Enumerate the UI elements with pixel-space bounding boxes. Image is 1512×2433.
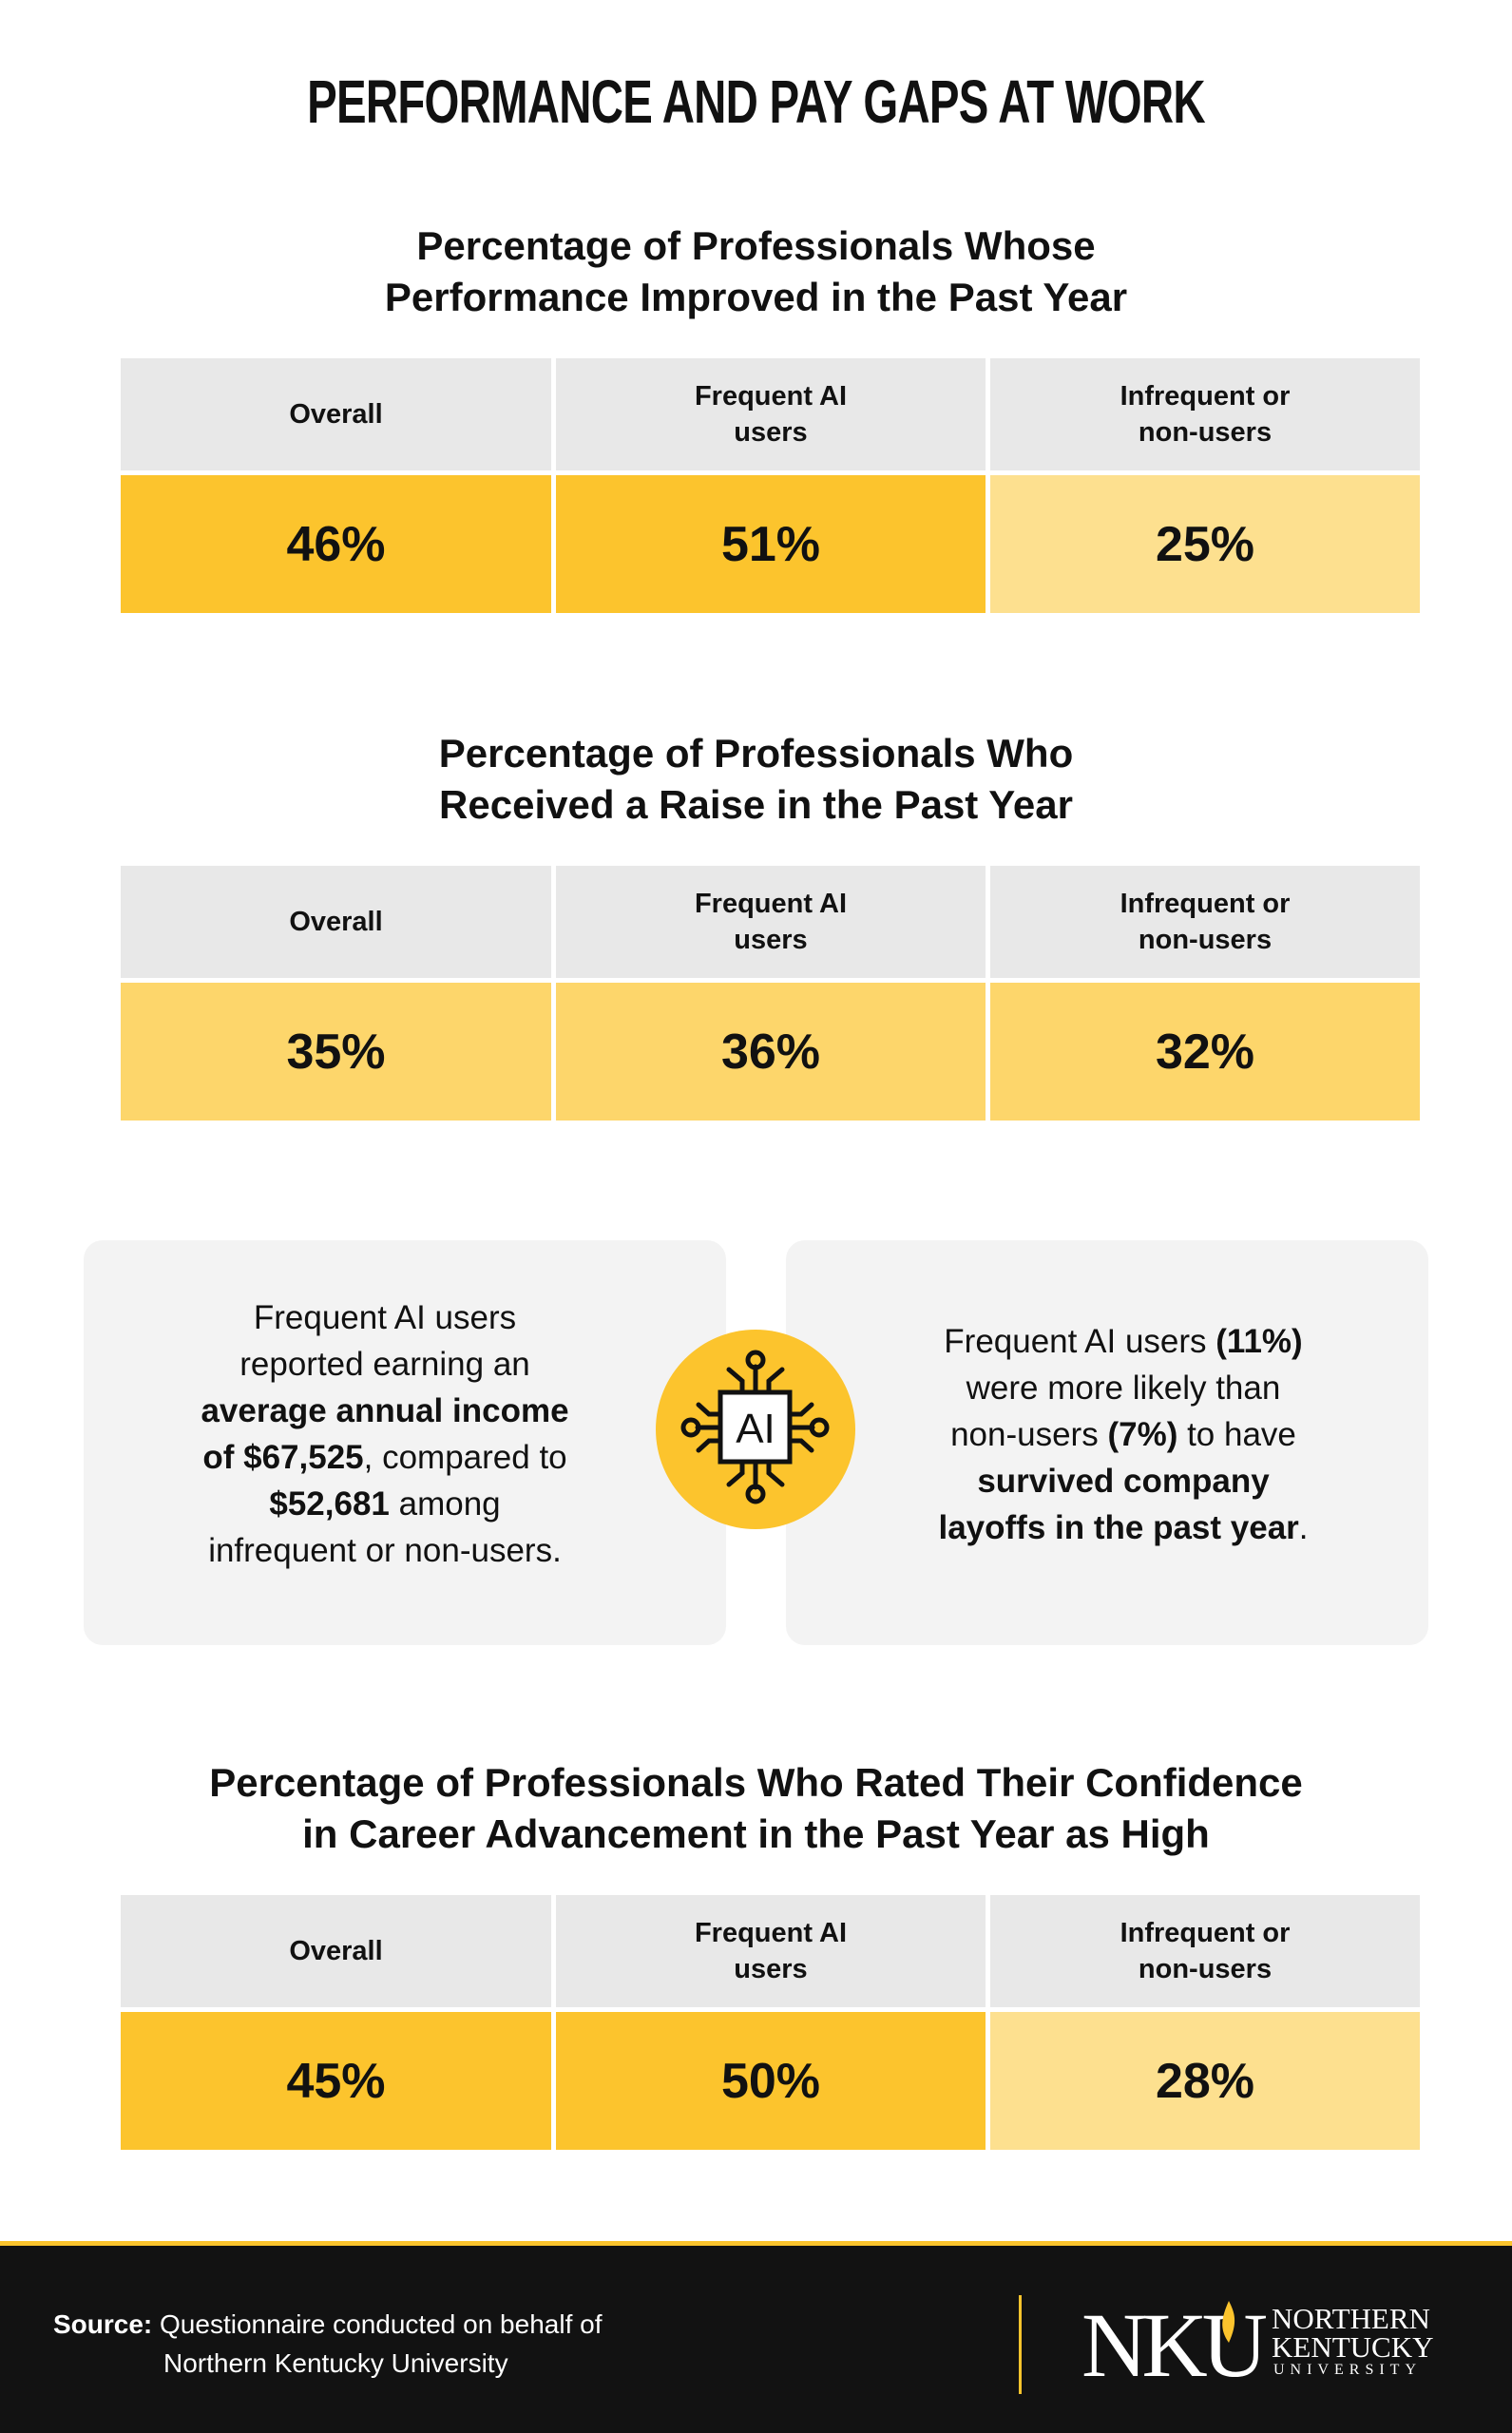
callout: income: of $67,525, compared to [202, 1439, 567, 1476]
callout: layoffs: were more likely than [967, 1370, 1280, 1407]
heading: confidence: Percentage of Professionals Who Rated Their Confidence [209, 1760, 1303, 1805]
heading: raise: Percentage of Professionals Who [439, 731, 1073, 776]
callout: income: $52,681 among [269, 1485, 501, 1523]
heading: performance [385, 223, 1127, 319]
table: confidence: non-users [1139, 1954, 1272, 1984]
heading: raise: Received a Raise in the Past Year [439, 782, 1073, 827]
table: performance: 25% [1156, 517, 1254, 572]
footer [0, 2241, 1512, 2433]
table: performance: 46% [286, 517, 386, 572]
table: raise: 32% [1156, 1025, 1254, 1080]
table: performance [121, 358, 1420, 613]
heading: confidence [209, 1760, 1303, 1856]
table: confidence: Infrequent or [1120, 1918, 1290, 1948]
callout: layoffs: non-users (7%) to have [950, 1416, 1296, 1453]
divider line [1019, 2295, 1022, 2394]
icon: AI chip: AI [736, 1406, 775, 1452]
table: raise: 35% [286, 1025, 386, 1080]
title: PERFORMANCE AND PAY GAPS AT WORK [307, 67, 1205, 136]
callout: income: reported earning an [239, 1346, 530, 1383]
table: performance: Infrequent or [1120, 381, 1290, 412]
logo: NKU [1081, 2294, 1433, 2396]
table: confidence: Frequent AI [695, 1918, 847, 1948]
heading: performance: Performance Improved in the Past Year [385, 275, 1127, 319]
table: confidence: users [734, 1954, 808, 1984]
source text: Source: Questionnaire conducted on behalf of [53, 2309, 602, 2339]
logo: NKU: NORTHERN [1272, 2302, 1430, 2335]
table: confidence [121, 1895, 1420, 2150]
table: performance: Frequent AI [695, 381, 847, 412]
callout: layoffs: survived company [977, 1463, 1270, 1500]
callout: income [84, 1240, 726, 1645]
callout: income: average annual income [201, 1392, 569, 1429]
table: confidence: 28% [1156, 2053, 1254, 2108]
table: performance: 51% [721, 517, 820, 572]
table: raise: non-users [1139, 925, 1272, 955]
heading: performance: Percentage of Professionals Whose [416, 223, 1096, 268]
table: raise [121, 866, 1420, 1121]
logo: NKU: NKU [1081, 2294, 1262, 2396]
callout: layoffs: layoffs in the past year. [938, 1509, 1309, 1546]
table: raise: Frequent AI [695, 889, 847, 919]
callout: income: infrequent or non-users. [208, 1532, 562, 1569]
table: performance: users [734, 417, 808, 448]
table: raise: 36% [721, 1025, 820, 1080]
source text [53, 2309, 603, 2378]
heading: raise [439, 731, 1073, 827]
table: raise: Overall [289, 907, 383, 937]
logo: NKU: KENTUCKY [1272, 2330, 1433, 2364]
logo: NKU: UNIVERSITY [1273, 2362, 1422, 2378]
table: raise: users [734, 925, 808, 955]
callout: income: Frequent AI users [254, 1299, 516, 1336]
callout: layoffs: Frequent AI users (11%) [944, 1323, 1303, 1360]
icon: AI chip [656, 1330, 855, 1529]
callout: layoffs [786, 1240, 1428, 1645]
heading: confidence: in Career Advancement in the Past Year as High [302, 1811, 1210, 1856]
table: performance: non-users [1139, 417, 1272, 448]
source text: Northern Kentucky University [163, 2348, 508, 2378]
table: performance: Overall [289, 399, 383, 430]
table: confidence: 45% [286, 2053, 386, 2108]
table: raise: Infrequent or [1120, 889, 1290, 919]
table: confidence: Overall [289, 1936, 383, 1966]
table: confidence: 50% [721, 2053, 820, 2108]
